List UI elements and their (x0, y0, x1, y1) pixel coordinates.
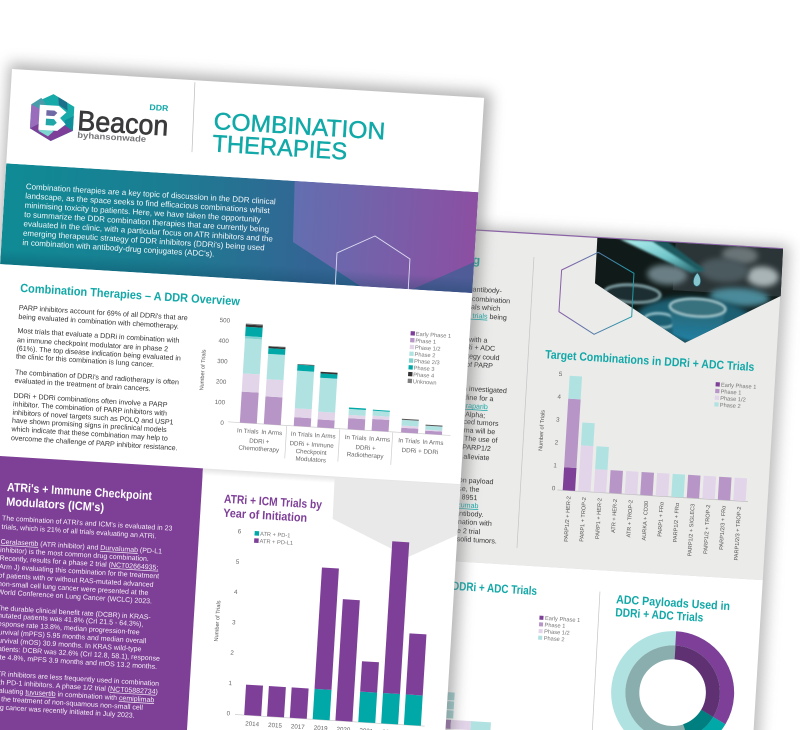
back page text column: DDRi + ADC (455, 343, 495, 353)
category labels: PARP1 + FRα (657, 501, 666, 537)
legend: Phase 3 (413, 366, 435, 373)
category labels: PARP1/2 + HER-2 (564, 496, 573, 542)
legend (254, 531, 294, 547)
overview text (10, 304, 188, 452)
y axis labels: 400 (218, 338, 230, 345)
grey chevron shape (330, 477, 460, 560)
category labels (235, 427, 444, 471)
purple panel text: non-small cell lung cancer were presented at the (0, 581, 149, 597)
back page text column: for Alpha; (455, 410, 485, 420)
back page text column: solid tumors. (456, 535, 497, 546)
purple panel text (0, 515, 173, 721)
category labels: PARP1/2/3 + FRα (719, 505, 728, 550)
by hansonwade: byhansonwade (77, 130, 147, 144)
y axis labels (213, 317, 231, 427)
legend: lower chart (538, 616, 580, 644)
purple panel heading (6, 480, 152, 517)
category labels: PARP1 + HER-2 (595, 498, 604, 539)
category labels: In Trials (398, 437, 420, 446)
back page text column: trials which (465, 303, 500, 313)
purple panel text: World Conference on Lung Cancer (WCLC) 2023. (0, 589, 152, 606)
wordmark Beacon: Beacon (77, 105, 169, 142)
photo of pipette and vials (595, 238, 783, 343)
heading: adc payloads: DDRi + ADC Trials (615, 605, 704, 625)
icon: hexagon logo mark (29, 93, 75, 142)
back page text column: zumab (457, 501, 479, 510)
purple panel text: trials, which is 21% of all trials evaluating an ATRi. (1, 524, 157, 540)
stacked bar chart: overview (195, 316, 457, 472)
year labels: 2014 (245, 720, 260, 728)
heading: adc payloads: ADC Payloads Used in (616, 592, 730, 613)
category labels: In Trials (291, 431, 313, 439)
y axis labels: 5 (559, 371, 563, 378)
heading: trials by year: ATRi + ICM Trials by (224, 492, 323, 512)
heading: overview: Combination Therapies – A DDR Overview (20, 281, 241, 308)
legend: Unknown (413, 379, 437, 387)
purple panel text: Arm J) evaluating this combination for the treatment (0, 564, 159, 580)
top edge line (276, 217, 783, 249)
bars (244, 533, 432, 726)
title (212, 108, 386, 168)
category labels: In Arms (369, 435, 390, 444)
back page text column: antibody. (455, 509, 484, 519)
y axis labels: 100 (214, 399, 226, 407)
heading: trials by year: Year of Initiation (223, 506, 308, 525)
y axis labels: 0 (226, 710, 231, 718)
legend: lower chart: Phase 1 (544, 623, 565, 630)
category labels: Chemotherapy (238, 445, 280, 454)
category labels: In Trials (345, 434, 367, 442)
category labels: DDRi + Immune (289, 440, 334, 450)
back page text column: PARP1/2 (462, 443, 491, 453)
intro text: emerging therapeutic strategy of DDR inhibitors (DDRi's) being used (23, 229, 265, 252)
back page text column: combination with (439, 517, 492, 528)
page background (0, 69, 484, 730)
year labels: 2015 (268, 722, 283, 730)
legend: Phase 4 (413, 372, 434, 380)
category labels: PARP1 + TROP-2 (579, 497, 588, 542)
category labels: DDRi + (355, 444, 376, 452)
white lower panel (238, 549, 763, 730)
back page text column: with antibody- (457, 285, 503, 295)
purple panel heading: ATRi's + Immune Checkpoint (7, 480, 152, 503)
category labels: PARP1/2 + SIGLEC3 (687, 504, 697, 556)
category labels: PARP1/2/3 + TROP-2 (734, 506, 743, 561)
purple panel text: Recently, results for a phase 2 trial (NCT02664935; (0, 555, 159, 572)
legend: Phase 1/2 (720, 396, 746, 404)
overview text: have shown promising signs in preclinical models (12, 417, 167, 434)
purple panel text: of patients with or without RAS-mutated advanced (0, 573, 154, 589)
purple panel text: The durable clinical benefit rate (DCBR) in KRAS- (0, 605, 152, 622)
back page text column: early trials being (455, 311, 507, 322)
back page text column: phase 2 trial (441, 526, 481, 536)
y axis labels: 300 (217, 358, 228, 366)
back page text column: the combination (460, 294, 510, 305)
back page text column: advanced tumors (444, 417, 499, 428)
category labels: AURKA + CD30 (642, 501, 650, 541)
legend: lower chart: Phase 1/2 (544, 629, 570, 637)
overview text: which indicate that these combination may help to (10, 425, 168, 443)
donut chart: adc payloads (615, 635, 730, 730)
back page shadow (238, 214, 790, 730)
category labels: PARP1/2 + TROP-2 (703, 505, 712, 554)
intro text (22, 182, 276, 262)
category labels: In Arms (314, 432, 336, 440)
horizontal bars fragment (443, 692, 493, 730)
y axis labels: 0 (552, 485, 556, 492)
purple panel: ATRi + ICM (0, 455, 203, 730)
legend: Early Phase 1 (721, 383, 756, 391)
purple panel text: The combination of ATRi's and ICM's is evaluated in 23 (2, 515, 173, 533)
legend: Phase 1 (415, 339, 436, 346)
heading: adc payloads (615, 592, 730, 626)
purple panel text: mutated patients was 41.8% (CrI 21.5 - 64.3%), (0, 612, 144, 628)
lower column divider (590, 592, 601, 730)
overview text: overcome the challenge of PARP inhibitor resistance. (11, 434, 178, 452)
overview text: inhibitors of novel targets such as POLQ and USP1 (12, 409, 174, 427)
y axis labels: 3 (556, 417, 560, 424)
legend: Phase 2 (720, 403, 741, 410)
heading: target combinations: Target Combinations in DDRi + ADC Trials (545, 347, 755, 374)
front page (0, 63, 491, 730)
bar chart: trials by year (209, 527, 436, 730)
y axis labels: 3 (232, 619, 236, 627)
y axis labels: 6 (238, 528, 242, 535)
overview text: inhibitor. The combination of PARP inhibitors with (13, 400, 167, 418)
back page text column: of PARP (466, 361, 493, 370)
column divider (516, 257, 535, 548)
intro text: in combination with antibody-drug conjugates (ADC's). (22, 238, 215, 259)
category labels: ATR + HER-2 (611, 499, 619, 533)
category labels: In Trials (237, 427, 259, 436)
back page text column: niraparib (460, 402, 488, 411)
DDR tag: DDR (149, 102, 169, 113)
back page text column: . The use of (460, 434, 498, 445)
heading: trials by year (223, 492, 323, 526)
y axis title: Number of Trials (214, 600, 222, 642)
stacked bars (563, 376, 753, 501)
y axis labels: 5 (236, 559, 240, 566)
y axis labels: 1 (553, 462, 558, 469)
back page text column: sarcoma will be (446, 425, 495, 436)
category labels (563, 495, 743, 561)
overview text: being evaluated in combination with chemotherapy. (18, 313, 179, 331)
category labels: Radiotherapy (346, 451, 385, 460)
category labels: In Arms (422, 439, 444, 447)
legend: Phase 1 (720, 389, 742, 397)
legend: ATR + PD-1 (260, 532, 291, 539)
back page text column: frontline for a (452, 393, 494, 403)
legend (407, 331, 451, 387)
back page text column: been investigated (451, 384, 507, 395)
overview text: The combination of DDRi's and radiotherapy is often (15, 368, 179, 386)
back page text column: common payload (439, 475, 494, 486)
legend: ATR + PD-L1 (259, 539, 293, 547)
category labels: PARP1/2 + FRα (673, 502, 681, 543)
overview text: an immune checkpoint modulator are in phase 2 (17, 336, 168, 353)
y axis labels: 200 (216, 378, 227, 386)
legend: Early Phase 1 (416, 332, 451, 340)
y axis labels: 2 (554, 439, 559, 447)
year labels (245, 720, 419, 730)
stacked bars (240, 323, 448, 435)
y axis labels: 2 (230, 650, 235, 657)
legend: Phase 2 (414, 352, 436, 359)
category labels: ATR + TROP-2 (626, 500, 635, 538)
legend: lower chart: Phase 2 (543, 636, 565, 643)
back page text column: case, the (450, 484, 480, 494)
intro text: Combination therapies are a key topic of discussion in the DDR clinical (26, 182, 276, 206)
back page text column: with a (468, 336, 488, 345)
category labels: Modulators (295, 456, 326, 464)
category labels: Checkpoint (295, 448, 327, 457)
intro text: evaluated in the clinic, with a particular focus on ATR inhibitors and the (23, 219, 274, 244)
purple panel heading: Modulators (ICM's) (6, 494, 105, 514)
y axis labels: 1 (228, 680, 233, 687)
back page text column (436, 284, 513, 546)
y axis title: Number of Trials (199, 349, 208, 391)
intro text: minimising toxicity to patients. Here, we have taken the opportunity (24, 201, 261, 224)
purple panel text: inhibitor) is the most common drug combination. (0, 547, 149, 563)
title: THERAPIES (212, 130, 348, 166)
seam shading above lower chart (203, 468, 460, 491)
back page text column: strategy could (455, 352, 500, 362)
logo: Beacon by hansonwade (29, 93, 170, 148)
legend (714, 382, 757, 411)
legend: Phase 1/2 (415, 345, 441, 353)
heading: lower chart fragment: DDRi + ADC Trials (452, 579, 538, 598)
y axis labels: 500 (219, 317, 231, 325)
back page text column: 8951 (461, 493, 478, 502)
overview text: Most trials that evaluate a DDRi in combination with (17, 327, 180, 345)
legend: Phase 2/3 (414, 359, 440, 366)
outline hexagon (558, 250, 635, 337)
category labels: DDRi + DDRi (401, 447, 438, 456)
header divider (191, 82, 196, 152)
y axis labels: 0 (220, 420, 225, 427)
back page (446, 219, 796, 730)
y axis labels: 4 (557, 394, 562, 401)
intro text: landscape, as the space seeks to find efficacious combinations whilst (25, 191, 271, 215)
front page shadow (0, 63, 491, 730)
overview text: the clinic for this combination is lung cancer. (16, 352, 154, 369)
purple panel text: Ceralasertib (ATR inhibitor) and Durvalumab (PD-L1 (0, 539, 162, 556)
y axis labels (552, 371, 563, 492)
back page heading fragment: Targeting (426, 250, 481, 267)
back page text column: to alleviate (455, 452, 490, 462)
y axis labels: 4 (234, 589, 238, 596)
category labels: In Arms (261, 429, 282, 437)
legend: lower chart: Early Phase 1 (545, 616, 580, 624)
overview text: (61%). The top disease indication being evaluated in (16, 345, 181, 363)
overview text: evaluated in the treatment of brain cancers. (14, 377, 151, 393)
title: COMBINATION (213, 108, 386, 145)
grey upper panel (256, 218, 783, 580)
category labels: DDRi + (249, 438, 270, 446)
banner (0, 164, 478, 293)
y axis title: Number of Trials (538, 410, 547, 451)
intro text: to summarize the DDR combination therapies that are currently being (24, 210, 269, 234)
y axis labels (226, 528, 242, 718)
bar chart: target combinations (532, 370, 757, 561)
overview text: DDRi + DDRi combinations often involve a PARP (13, 392, 168, 409)
overview text: PARP inhibitors account for 69% of all DDRi's that are (19, 304, 188, 322)
